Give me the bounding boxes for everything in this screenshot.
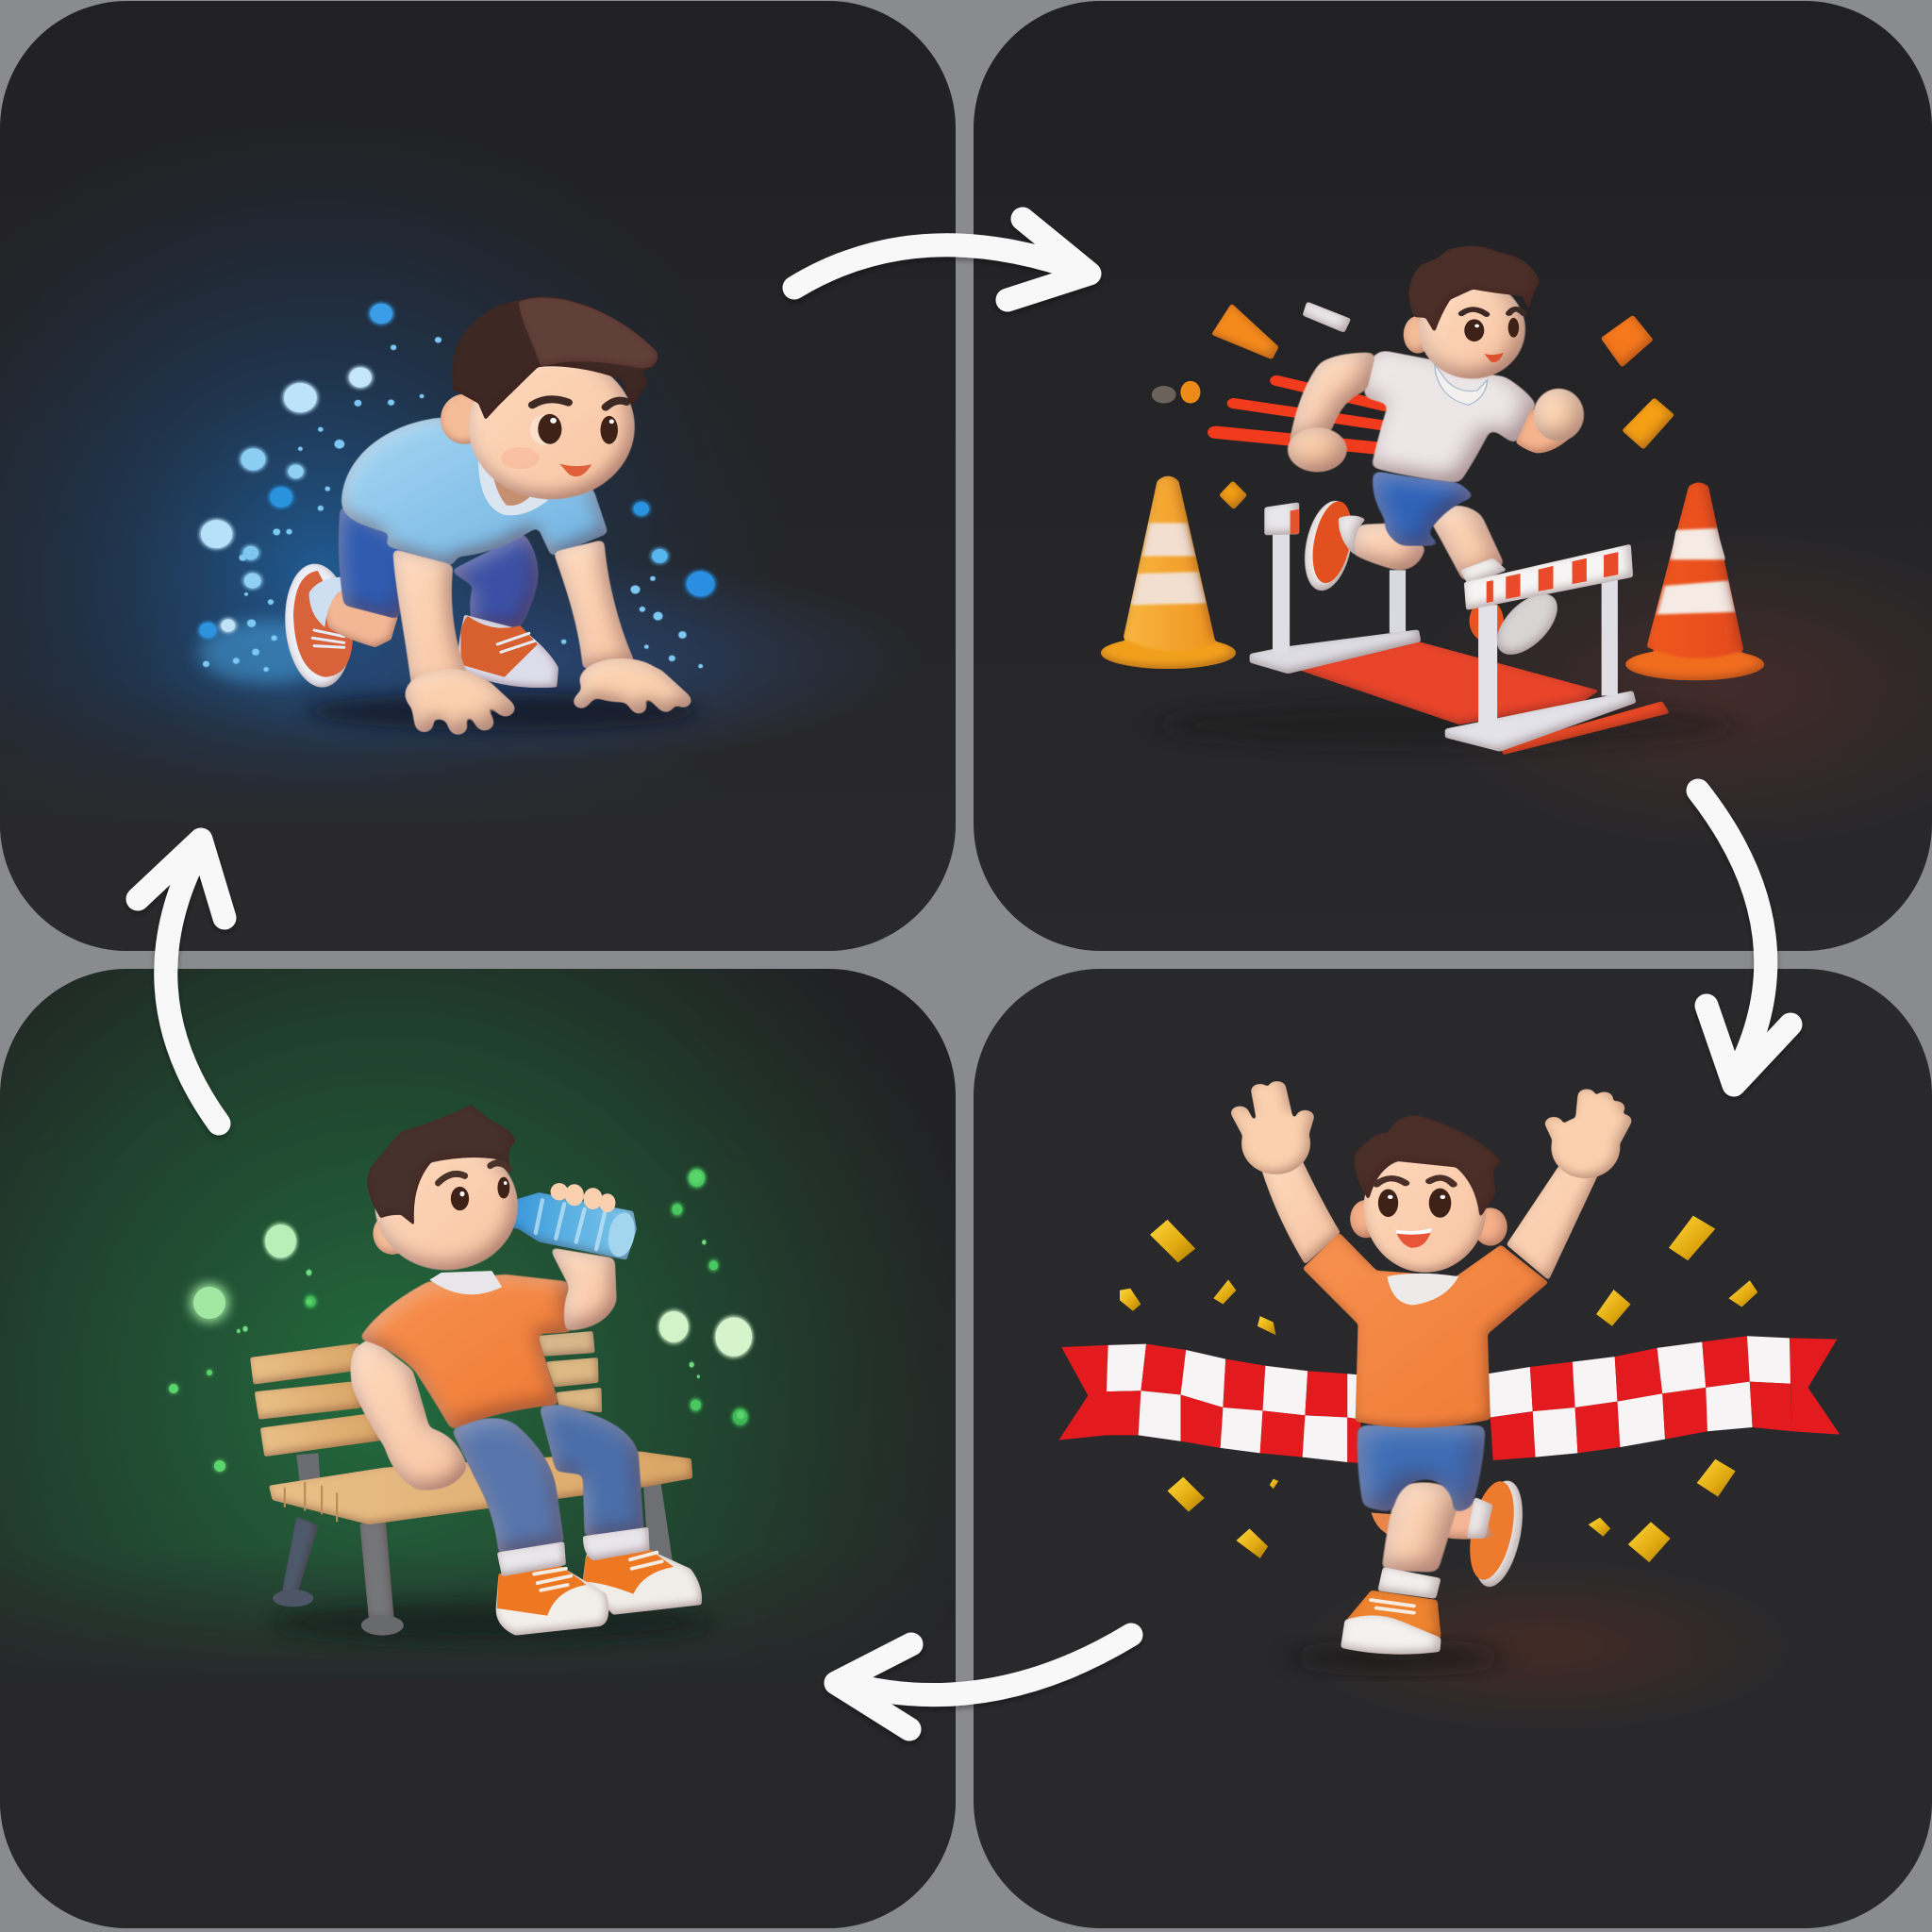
jeans: near leg bbox=[452, 1418, 564, 1555]
arm: right raised bbox=[1507, 1165, 1599, 1280]
hurdle: front frame bbox=[1445, 544, 1670, 755]
head bbox=[1404, 246, 1540, 379]
arm: raised bbox=[549, 1247, 617, 1330]
shirt bbox=[358, 1274, 573, 1429]
hand: far bbox=[579, 658, 684, 707]
arrow: hurdle to finish bbox=[1698, 791, 1790, 1085]
hand: fist bbox=[1533, 389, 1584, 441]
floor shadow bbox=[308, 692, 698, 730]
scene: boy jumping hurdle bbox=[1101, 246, 1764, 755]
sock bbox=[1377, 1567, 1441, 1599]
collar bbox=[429, 1271, 502, 1294]
panel: start (blue) bbox=[0, 1, 956, 951]
head bbox=[1350, 1115, 1507, 1273]
floor shadow bbox=[273, 1603, 711, 1642]
shirt bbox=[1365, 350, 1536, 483]
arm: front bbox=[1516, 408, 1573, 453]
hand: gripping fingers bbox=[551, 1183, 615, 1212]
icon: speed lines bbox=[1216, 380, 1385, 448]
shoe: near bbox=[496, 1563, 608, 1636]
hand: right bbox=[1551, 1096, 1623, 1178]
front leg and shoe bbox=[1428, 506, 1570, 662]
shorts bbox=[1357, 1425, 1485, 1515]
arrow: rest to start bbox=[138, 840, 225, 1124]
collar bbox=[1435, 364, 1488, 405]
shirt bbox=[1303, 1233, 1549, 1428]
icon: red cone bbox=[1625, 482, 1764, 680]
icon: green glowing particles bbox=[237, 1170, 752, 1425]
floor shadow bbox=[1291, 1646, 1504, 1670]
shorts bbox=[1373, 471, 1475, 545]
leg: back bbox=[1372, 1497, 1493, 1540]
panel: finish (red) bbox=[974, 969, 1932, 1928]
front shoe bbox=[458, 614, 558, 688]
leg: front bbox=[1382, 1482, 1461, 1573]
icon: green particles left of bench bbox=[169, 1172, 744, 1472]
scene: boy in starting crouch bbox=[199, 296, 714, 730]
head bbox=[367, 1105, 518, 1270]
shoe: front bbox=[1341, 1591, 1441, 1655]
back shorts bbox=[339, 505, 419, 619]
jeans: far leg bbox=[539, 1405, 644, 1537]
panel: rest (green) bbox=[0, 969, 956, 1928]
floor shadow bbox=[1158, 705, 1735, 746]
collar bbox=[1387, 1274, 1458, 1305]
arm: far bbox=[554, 540, 635, 669]
arrow: finish to rest bbox=[836, 1635, 1131, 1729]
scene: boy crossing finish line bbox=[1058, 1088, 1840, 1670]
icon: confetti and dots bbox=[1152, 302, 1674, 509]
sock: near bbox=[497, 1541, 566, 1576]
collar bbox=[478, 458, 548, 515]
hurdle: rear frame and mat bbox=[1250, 502, 1599, 724]
arm: rear bbox=[1289, 353, 1376, 446]
icon: water bottle bbox=[495, 1192, 639, 1260]
bench bbox=[250, 1331, 692, 1636]
back leg and shoe bbox=[1298, 498, 1425, 593]
head bbox=[441, 296, 658, 499]
shoe: raised back bbox=[1463, 1478, 1530, 1590]
sock: far bbox=[583, 1527, 650, 1560]
shoe: far bbox=[583, 1549, 702, 1615]
panel: hurdle (orange) bbox=[974, 1, 1932, 951]
icon: gold confetti bbox=[1120, 1216, 1757, 1562]
front leg bbox=[450, 533, 539, 627]
shirt bbox=[341, 418, 608, 566]
arm: left raised bbox=[1260, 1156, 1341, 1264]
hand: rear bbox=[1288, 427, 1347, 472]
arrow: start to hurdle bbox=[794, 219, 1090, 300]
icon: yellow cone bbox=[1101, 475, 1236, 669]
neck bbox=[492, 471, 534, 506]
banner: checkered finish ribbon bbox=[1058, 1336, 1840, 1463]
scene: boy resting on bench with water bbox=[237, 1105, 752, 1642]
back shoe bbox=[280, 561, 357, 690]
hand: left bbox=[1240, 1088, 1310, 1174]
back shin and sock bbox=[309, 577, 398, 647]
arm: near bbox=[392, 549, 472, 690]
arm: resting bbox=[351, 1338, 467, 1491]
icon: blue glowing particles bbox=[199, 304, 714, 683]
hand: near bbox=[405, 669, 506, 726]
